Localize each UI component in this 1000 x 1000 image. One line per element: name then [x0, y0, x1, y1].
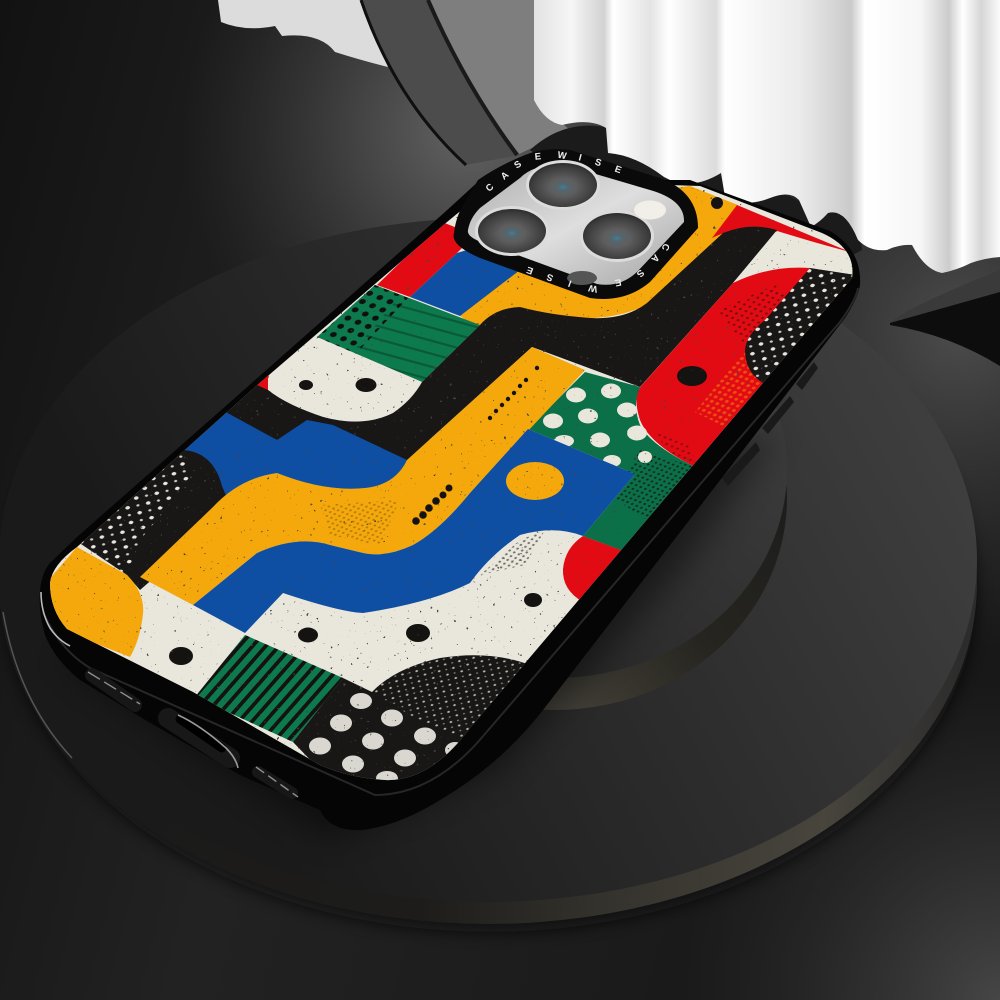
brand top: I	[577, 152, 583, 164]
cream black dots	[169, 378, 542, 665]
disc shadow	[4, 252, 976, 932]
green stripes	[356, 303, 478, 380]
red dark halftone	[720, 286, 784, 342]
cream base	[50, 185, 852, 780]
bottom red semicircle	[563, 536, 621, 600]
lens right	[580, 210, 654, 262]
brand bottom: A	[648, 252, 661, 264]
bottom dotted black	[293, 655, 530, 790]
top yellow	[460, 186, 738, 330]
left curtain	[218, 0, 388, 67]
main blue band	[193, 429, 635, 633]
brand top: S	[593, 157, 603, 169]
case edge highlight	[43, 288, 858, 795]
cream blob	[268, 337, 422, 422]
big red shape	[636, 268, 810, 468]
lens top	[526, 160, 600, 210]
brand bottom: I	[567, 277, 573, 289]
brand top	[484, 150, 623, 194]
cream halftone	[480, 530, 545, 575]
green dark dots	[317, 285, 408, 358]
right stand foot	[890, 270, 1000, 366]
white green dots	[543, 384, 652, 467]
top left blue	[410, 250, 518, 316]
brand bottom: S	[634, 267, 646, 279]
blue gold circle	[506, 462, 564, 500]
flash	[634, 200, 666, 220]
bottom left port	[88, 672, 140, 705]
brand top: E	[534, 151, 542, 163]
charging port	[168, 715, 238, 768]
stand arcs	[361, 0, 570, 165]
brand bottom: E	[525, 264, 535, 276]
brand top: C	[484, 182, 496, 194]
disc face	[0, 218, 977, 902]
speckle texture	[0, 150, 900, 800]
left white dots	[78, 450, 190, 575]
brand top: A	[499, 169, 511, 182]
right white dots	[745, 268, 856, 383]
top left red	[377, 223, 462, 297]
bottom stripe overlay	[195, 635, 343, 742]
yellow halftone	[320, 500, 400, 545]
left dotted black	[78, 450, 232, 590]
brand bottom: S	[545, 271, 555, 283]
small plate	[323, 262, 787, 710]
side button high	[796, 362, 818, 390]
brand top: E	[613, 164, 623, 176]
island glass	[468, 165, 684, 285]
side button low	[722, 442, 760, 486]
yellow dot rows	[412, 197, 723, 525]
brand top: S	[512, 159, 524, 171]
black band	[222, 227, 777, 460]
brand bottom	[525, 242, 671, 294]
brand top: W	[557, 150, 567, 162]
plate face	[323, 262, 787, 678]
rim highlight	[3, 612, 72, 758]
red lower halftone	[658, 434, 696, 464]
camera island	[454, 149, 698, 299]
large bottom dots	[309, 693, 465, 785]
phone	[40, 180, 860, 830]
bottom right port	[256, 767, 298, 797]
upper right cream	[733, 231, 856, 283]
main yellow band	[140, 347, 585, 605]
fine bottom dots	[374, 656, 522, 737]
side button mid	[762, 396, 794, 434]
striped green	[317, 285, 480, 382]
small red corner	[252, 375, 272, 393]
brand bottom: W	[588, 282, 598, 294]
red black dot	[677, 366, 707, 386]
top right red	[712, 205, 850, 252]
right dotted black	[745, 268, 856, 383]
red orange halftone	[695, 350, 763, 428]
bottom green stripes	[195, 635, 343, 742]
green halftone	[616, 450, 692, 519]
base behind curtain	[530, 126, 862, 262]
right curtain	[534, 0, 1000, 273]
disc rim	[0, 240, 977, 924]
large disc	[0, 218, 977, 932]
left yellow semicircle	[40, 547, 143, 657]
phone case body	[40, 180, 860, 830]
island frame	[454, 149, 698, 299]
phone shadow	[60, 430, 780, 840]
brand bottom: C	[659, 242, 671, 252]
corner gloss	[41, 592, 70, 646]
plate side	[323, 286, 787, 710]
green dotted panel	[528, 372, 697, 551]
brand bottom: E	[614, 276, 622, 288]
lens left	[475, 206, 549, 256]
small sensor	[567, 271, 597, 285]
left blue band	[184, 408, 430, 496]
case artwork	[50, 185, 852, 780]
